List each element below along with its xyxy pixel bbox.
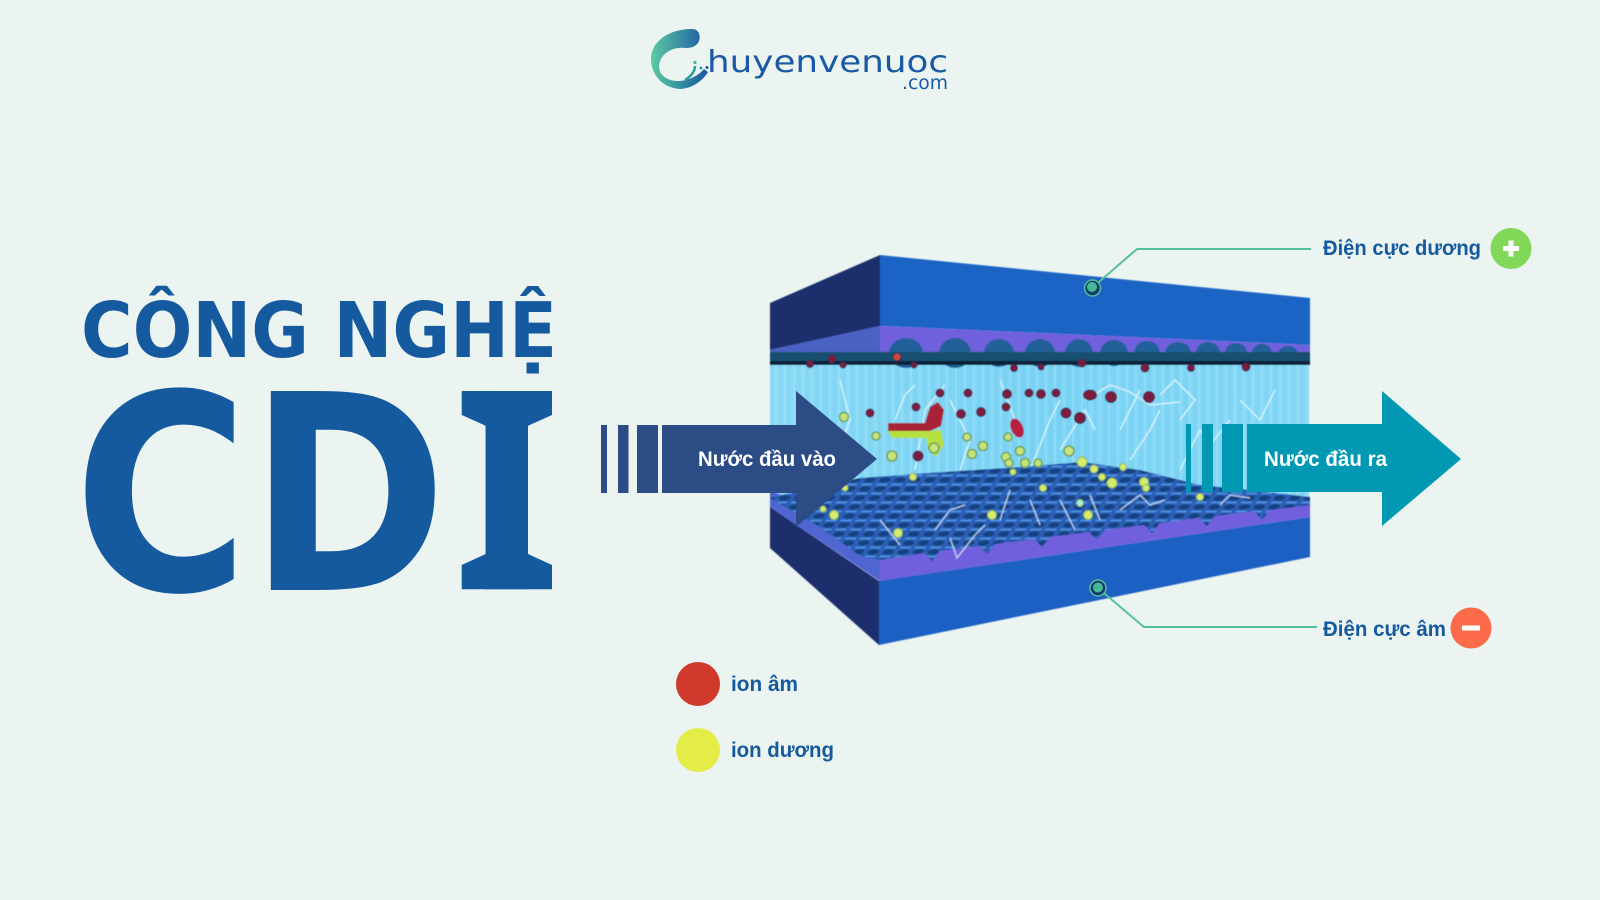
- logo mark: [651, 29, 708, 89]
- title: CDI: CD: [74, 338, 447, 655]
- top electrode: front: [880, 255, 1310, 345]
- positive ions: [840, 412, 1074, 468]
- logo wordmark: huyenvenuoc: [707, 45, 948, 80]
- legend: positive ion: ion dương: [731, 739, 834, 762]
- bottom electrode: left side: [770, 507, 879, 645]
- water channel: [770, 360, 1309, 505]
- title: CDI: [86, 387, 552, 594]
- arrow: water outlet: [1186, 391, 1461, 526]
- infographic canvas: [84, 29, 1532, 772]
- legend: negative ion: [676, 662, 798, 706]
- bottom membrane: [770, 490, 1310, 581]
- top membrane: [770, 326, 1310, 368]
- legend: positive ion: [676, 728, 834, 772]
- logo domain: .com: [902, 72, 948, 94]
- icon: plus: [1490, 228, 1532, 269]
- bottom electrode: front: [879, 517, 1310, 645]
- legend: negative ion: ion âm: [731, 673, 798, 696]
- bottom carbon surface: [770, 462, 1310, 561]
- arrow: water inlet: [601, 391, 877, 527]
- icon: minus: [1450, 608, 1492, 648]
- label: positive electrode: Điện cực dương: [1323, 237, 1481, 260]
- negative ions: [806, 353, 1250, 461]
- connector: negative electrode: [1090, 580, 1317, 627]
- top electrode: left side: [770, 255, 880, 350]
- water ripples: [835, 380, 1275, 470]
- title: CÔNG NGHỆ: CÔNG NGHỆ: [81, 285, 557, 376]
- surface cracks: [880, 490, 1250, 558]
- title: CDI: I: [463, 338, 551, 655]
- arrow: water inlet: Nước đầu vào: [698, 448, 836, 471]
- migration arrow: red: [888, 402, 944, 431]
- ion blob: [1007, 416, 1027, 440]
- label: negative electrode: Điện cực âm: [1323, 618, 1446, 641]
- migration arrow: yellow: [888, 430, 944, 457]
- logo: [651, 29, 948, 94]
- connector: positive electrode: [1084, 249, 1311, 296]
- arrow: water outlet: Nước đầu ra: [1264, 448, 1387, 471]
- CDI cell diagram: [770, 255, 1310, 645]
